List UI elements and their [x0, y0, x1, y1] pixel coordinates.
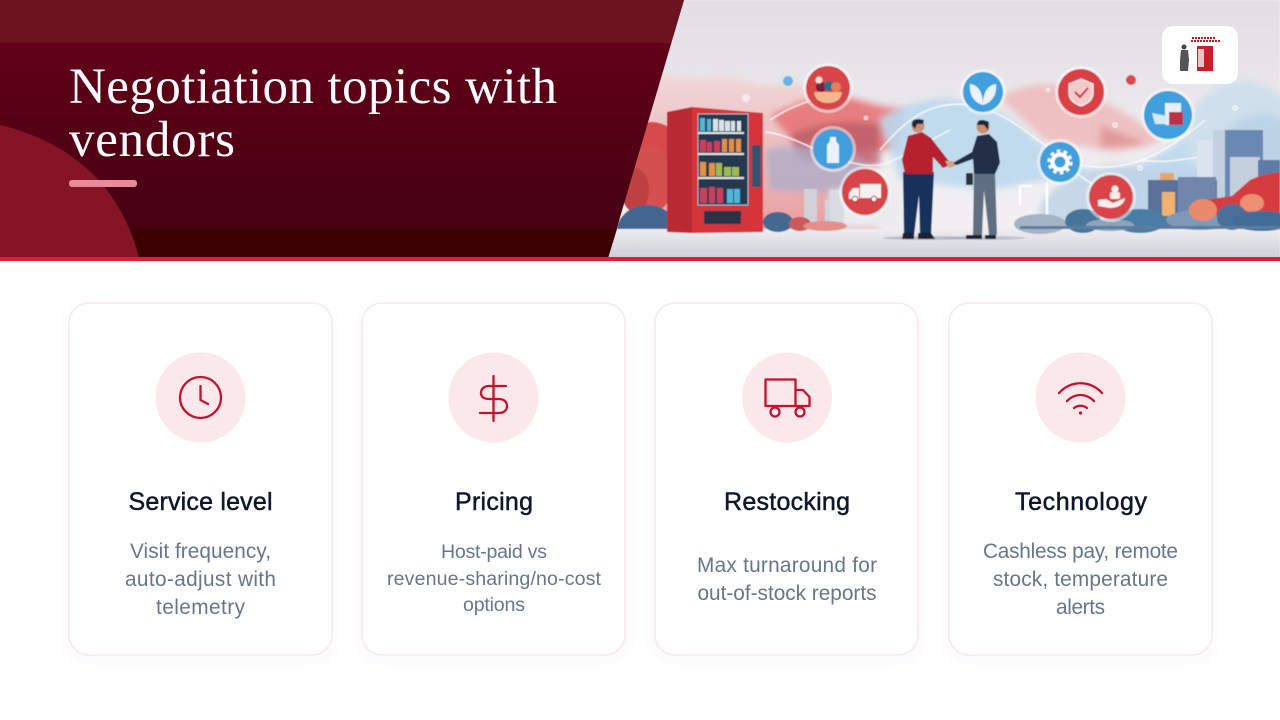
card: pricing	[362, 303, 625, 655]
icon: dollar sign	[448, 352, 538, 442]
heading: Service level	[128, 488, 272, 516]
title: Negotiation topics with	[69, 59, 557, 115]
distant buildings	[804, 130, 1280, 230]
logo badge	[1162, 26, 1238, 84]
description	[125, 540, 276, 619]
title: vendors	[69, 112, 235, 168]
description: revenue-sharing/no-cost	[387, 568, 602, 590]
floating icon: shield	[1055, 66, 1107, 118]
floating icon: bottle	[810, 126, 856, 172]
description: Host-paid vs	[441, 541, 547, 563]
flowing network lines	[765, 88, 1237, 197]
ground	[600, 229, 1280, 258]
floating spheres	[742, 75, 1136, 102]
description: stock, temperature	[993, 568, 1168, 591]
description: out-of-stock reports	[698, 582, 876, 605]
description: options	[463, 594, 525, 616]
top stripe	[0, 0, 684, 43]
description: Max turnaround for	[697, 554, 877, 577]
title underline	[69, 180, 137, 187]
person in dark jacket	[945, 120, 1025, 240]
floating icon: leaves	[960, 69, 1006, 115]
person in red sweater	[883, 119, 967, 240]
hero illustration	[600, 0, 1280, 258]
background hills	[630, 76, 1280, 232]
floating icon: packaged goods	[1141, 88, 1195, 142]
heading: Restocking	[724, 488, 850, 516]
description: alerts	[1056, 596, 1105, 619]
description	[983, 540, 1178, 619]
description: Visit frequency,	[130, 540, 271, 563]
heading: Technology	[1015, 488, 1148, 516]
icon: clock	[156, 352, 246, 442]
floating icon: delivery truck	[839, 166, 891, 218]
icon: wifi	[1036, 352, 1126, 442]
floating icon: food bowl	[803, 63, 853, 113]
description	[387, 541, 602, 616]
card: service level	[69, 303, 332, 655]
description: telemetry	[156, 596, 246, 619]
vending machine	[667, 107, 763, 233]
icon: truck	[742, 352, 832, 442]
card: restocking	[655, 303, 918, 655]
description: Cashless pay, remote	[983, 540, 1178, 563]
decorative circle	[0, 125, 139, 258]
floating icon: gear	[1037, 139, 1083, 185]
bushes	[616, 122, 1280, 234]
red banner rule	[0, 257, 1280, 261]
heading: Pricing	[455, 488, 533, 516]
bottom stripe	[0, 229, 617, 258]
floating icon: hand with person	[1086, 172, 1136, 222]
description	[697, 554, 877, 605]
card: technology	[949, 303, 1212, 655]
header banner	[0, 0, 684, 258]
description: auto-adjust with	[125, 568, 276, 591]
